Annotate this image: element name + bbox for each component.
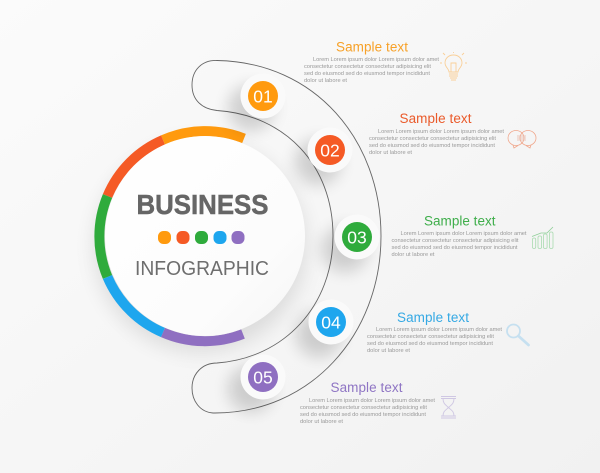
- text block 1: dolor ut labore et: [304, 78, 347, 84]
- icon: magnifier: [507, 324, 528, 345]
- text block 4: Lorem Lorem ipsum dolor Lorem ipsum dolor amet: [376, 327, 502, 333]
- badge 04: [296, 300, 354, 357]
- icon: light bulb: [440, 52, 467, 80]
- ring: orange segment: [163, 131, 244, 140]
- text block 2: dolor ut labore et: [369, 150, 412, 156]
- badge 02: [295, 128, 352, 185]
- text block 4: dolor ut labore et: [367, 348, 410, 354]
- text block 4: sed do eiusmod sed do eiusmod tempor incididunt: [367, 341, 493, 347]
- badge 03: 03: [347, 228, 367, 248]
- text block 5: consectetur consectetur consectetur adipisicing elit: [300, 405, 427, 411]
- icon: hourglass: [441, 396, 456, 418]
- ring: green segment: [99, 196, 108, 277]
- main circle with ring: [94, 131, 306, 352]
- badge 05: 05: [253, 368, 273, 388]
- text block 1: sed do eiusmod sed do eiusmod tempor incididunt: [304, 71, 430, 77]
- text block 4: consectetur consectetur consectetur adipisicing elit: [367, 334, 494, 340]
- text block 3: Lorem Lorem ipsum dolor Lorem ipsum dolor amet: [400, 231, 527, 237]
- badge 02: 02: [320, 140, 340, 160]
- text block 1: [304, 40, 439, 84]
- colored dots: [158, 231, 244, 244]
- text block 5: Lorem Lorem ipsum dolor Lorem ipsum dolor amet: [309, 398, 435, 404]
- text block 3: sed do eiusmod sed do eiusmod tempor incididunt: [392, 245, 518, 251]
- text block 5: dolor ut labore et: [300, 419, 343, 425]
- text block 3: Sample text: [424, 214, 496, 228]
- text block 1: consectetur consectetur consectetur adipisicing elit: [304, 64, 431, 70]
- heading: INFOGRAPHIC: INFOGRAPHIC: [135, 258, 269, 280]
- text block 2: Lorem Lorem ipsum dolor Lorem ipsum dolor amet: [378, 129, 504, 135]
- badge 01: 01: [253, 86, 273, 106]
- text block 4: Sample text: [397, 310, 469, 325]
- text block 3: dolor ut labore et: [392, 252, 435, 258]
- text block 2: consectetur consectetur consectetur adipisicing elit: [369, 136, 496, 142]
- text block 5: [300, 380, 435, 425]
- badge 05: [228, 354, 286, 412]
- icon: growth chart: [532, 227, 553, 248]
- text block 3: consectetur consectetur consectetur adipisicing elit: [392, 238, 519, 244]
- badge 03: [322, 214, 380, 272]
- ring: blue segment: [108, 277, 163, 332]
- text block 5: Sample text: [330, 380, 403, 395]
- ring: red segment: [108, 140, 163, 196]
- text block 2: Sample text: [400, 111, 472, 126]
- text block 2: sed do eiusmod sed do eiusmod tempor incididunt: [369, 143, 495, 149]
- badge 04: 04: [321, 312, 341, 332]
- text block 3: [392, 214, 527, 258]
- icon: speech bubbles: [508, 130, 536, 148]
- text block 5: sed do eiusmod sed do eiusmod tempor incididunt: [300, 412, 426, 418]
- heading: BUSINESS: BUSINESS: [136, 189, 268, 220]
- text block 1: Sample text: [336, 40, 408, 54]
- text block 1: Lorem Lorem ipsum dolor Lorem ipsum dolor amet: [313, 57, 439, 63]
- ring: purple segment: [163, 332, 243, 341]
- circle shadow: [94, 140, 306, 352]
- text block 4: [367, 310, 502, 354]
- badge 01: [228, 74, 286, 131]
- connector outline path: [192, 60, 381, 413]
- text block 2: [369, 111, 504, 156]
- white disc: [105, 136, 305, 336]
